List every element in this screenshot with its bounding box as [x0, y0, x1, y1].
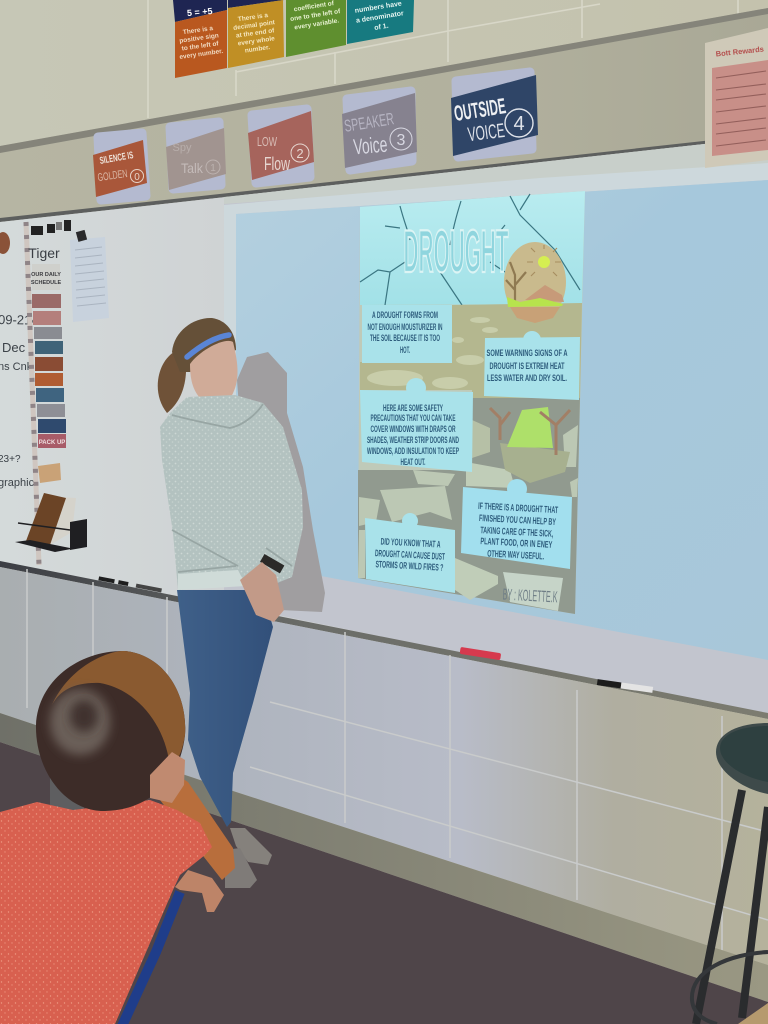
drought infographic projected on the board: BY : KOLETTE.K [502, 587, 558, 606]
text box: how droughts form: HOT. [400, 345, 410, 356]
gray cracked earth [358, 398, 580, 614]
baseboard [0, 713, 768, 1002]
hair [36, 651, 185, 811]
presenting girl [158, 318, 303, 888]
pack up card: PACK UP [39, 440, 65, 446]
schedule title card: SCHEDULE [31, 280, 61, 286]
poster: decimal point rule: every whole [237, 35, 276, 47]
voice sign 2: low flow: Flow [264, 154, 291, 174]
bar stool [692, 723, 768, 1024]
text box: helping after a drought: IF THERE IS A DROUGHT THAT [478, 501, 558, 516]
voice sign 3: speaker voice [342, 91, 417, 170]
voice sign 4: outside voice: 4 [513, 113, 525, 135]
schedule title card: OUR DAILY [31, 272, 61, 278]
lower block wall [0, 567, 768, 965]
voice sign 2: low flow: LOW [257, 134, 277, 149]
stool seat [716, 723, 768, 794]
voice sign 0: silence is golden: 0 [134, 172, 140, 183]
hand on head [150, 752, 185, 803]
voice sign 3: speaker voice: 3 [397, 132, 406, 149]
voice sign 2: low flow: 2 [296, 146, 304, 161]
poster: coefficient rule: coefficient of [293, 0, 335, 13]
voice sign 4: outside voice: OUTSIDE [452, 93, 507, 126]
poster: decimal point rule: There is a [237, 12, 269, 23]
poster: positive sign rule: every number. [179, 48, 224, 61]
ledge band [0, 8, 768, 222]
poster: decimal point rule [228, 0, 284, 68]
poster: coefficient rule [286, 0, 346, 57]
text box: safety precautions: HERE ARE SOME SAFETY [383, 403, 443, 414]
decorative tape strip [26, 222, 39, 565]
poster: coefficient rule: every variable. [294, 17, 340, 31]
schedule heading: Tiger [28, 245, 60, 261]
voice sign 4: outside voice: VOICE [467, 120, 506, 146]
girl shadow on board [237, 352, 325, 612]
poster: decimal point rule: number. [244, 44, 271, 55]
poster: positive sign rule [173, 0, 227, 78]
text box: safety precautions: PRECAUTIONS THAT YOU CAN TAKE [370, 413, 456, 424]
pack up card [38, 434, 66, 448]
voice sign 1: spy talk: Spy [173, 142, 192, 154]
text box: safety precautions: HEAT OUT. [400, 457, 426, 468]
blue chair back [122, 892, 180, 1024]
poster background [358, 191, 585, 614]
voice sign 0: silence is golden: SILENCE IS [99, 150, 134, 167]
magnets on the board [0, 220, 71, 254]
behavior rewards poster [705, 28, 768, 168]
text box: did you know: DID YOU KNOW THAT A [380, 536, 441, 551]
text box: warning signs: LESS WATER AND DRY SOIL. [487, 373, 567, 384]
voice sign 0: silence is golden: GOLDEN [97, 168, 128, 184]
gray hoodie [160, 395, 303, 590]
text box: safety precautions [360, 378, 473, 472]
text box: safety precautions: COVER WINDOWS WITH DRAPS OR [370, 424, 456, 435]
left board handwriting [0, 312, 39, 489]
text box: did you know [365, 513, 455, 593]
poster: positive sign rule: 5 = +5 [187, 6, 213, 18]
text box: safety precautions: WINDOWS, ADD INSULATION TO KEEP [367, 446, 459, 457]
forearm [160, 772, 235, 880]
colored math rule posters [173, 0, 414, 78]
text box: did you know: DROUGHT CAN CAUSE DUST [375, 548, 445, 563]
poster: decimal point rule: at the end of [236, 27, 276, 40]
jeans [177, 590, 273, 827]
text box: warning signs: DROUGHT IS EXTREM HEAT [490, 361, 565, 372]
red shirt [0, 800, 212, 1024]
green tree icon [490, 407, 570, 455]
whiteboard surface [0, 137, 768, 716]
text box: helping after a drought: FINISHED YOU CAN HELP BY [479, 513, 557, 528]
shoes [225, 828, 272, 888]
paper clipped to board [70, 230, 109, 322]
seated boy [0, 651, 235, 1024]
marker: red [460, 647, 501, 660]
poster: denominator rule: numbers have [354, 0, 402, 15]
voice sign 4: outside voice [451, 72, 538, 157]
text box: how droughts form [362, 305, 452, 363]
text box: helping after a drought: OTHER WAY USEFUL. [487, 548, 544, 562]
stool ring [692, 952, 768, 1024]
text box: how droughts form: NOT ENOUGH MOUSTURIZER IN [368, 322, 443, 333]
text box: did you know: STORMS OR WILD FIRES ? [375, 559, 444, 574]
headband [187, 335, 229, 357]
voice sign 2: low flow [248, 109, 314, 183]
text box: warning signs: SOME WARNING SIGNS OF A [486, 348, 568, 359]
voice sign 3: speaker voice: SPEAKER [343, 109, 395, 136]
markers on tray [98, 576, 653, 693]
text box: how droughts form: A DROUGHT FORMS FROM [372, 310, 438, 321]
tan stone band [360, 303, 582, 400]
poster: positive sign rule: positive sign [179, 32, 219, 45]
text box: helping after a drought: TAKING CARE OF THE SICK, [480, 525, 554, 540]
left board handwriting: Dec [2, 340, 26, 355]
text box: safety precautions: SHADES, WEATHER STRIP DOORS AND [367, 435, 459, 446]
tree with sun icon [504, 242, 566, 323]
wooden corner [738, 1003, 768, 1024]
voice sign 0: silence is golden [93, 133, 147, 200]
voice sign 1: spy talk [166, 122, 226, 190]
projected screen light [236, 180, 768, 660]
voice sign 1: spy talk: 1 [210, 163, 216, 174]
behavior rewards poster: Bott Rewards [715, 45, 764, 59]
marker: black [597, 679, 653, 693]
neck shadow [50, 775, 84, 810]
poster: positive sign rule: There is a [182, 25, 214, 36]
carpet floor [0, 742, 768, 1024]
clasped hands [240, 562, 284, 622]
text box: warning signs [484, 331, 580, 400]
drought infographic projected on the board: DROUGHT [404, 218, 508, 285]
voice sign 3: speaker voice: Voice [352, 132, 388, 159]
tiger daily schedule chart [28, 245, 66, 448]
stool legs [696, 790, 768, 1024]
poster: denominator rule: of 1. [374, 23, 389, 32]
poster: decimal point rule: decimal point [233, 19, 276, 32]
poster: denominator rule: a denominator [356, 10, 405, 25]
watch [260, 554, 284, 573]
marker: left [98, 576, 162, 592]
cracked sky area [360, 191, 585, 305]
upper cinder block wall [0, 0, 768, 146]
text box: helping after a drought [461, 479, 572, 569]
text box: how droughts form: THE SOIL BECAUSE IT IS TOO [370, 333, 440, 344]
face [190, 341, 238, 405]
drought infographic projected on the board [358, 191, 585, 614]
eraser [38, 463, 61, 483]
voice sign 1: spy talk: Talk [181, 160, 204, 176]
poster: positive sign rule: to the left of [181, 40, 220, 53]
text box: helping after a drought: PLANT FOOD, OR IN ENEY [480, 536, 553, 551]
hoodie waistband [178, 570, 246, 590]
book on wall shelf [15, 493, 87, 552]
ponytail and hair [158, 318, 236, 413]
poster: denominator rule [347, 0, 414, 44]
schedule title card [31, 264, 61, 290]
poster: coefficient rule: one to the left of [290, 8, 342, 23]
lower hand [175, 870, 224, 912]
pen tray [0, 561, 768, 719]
